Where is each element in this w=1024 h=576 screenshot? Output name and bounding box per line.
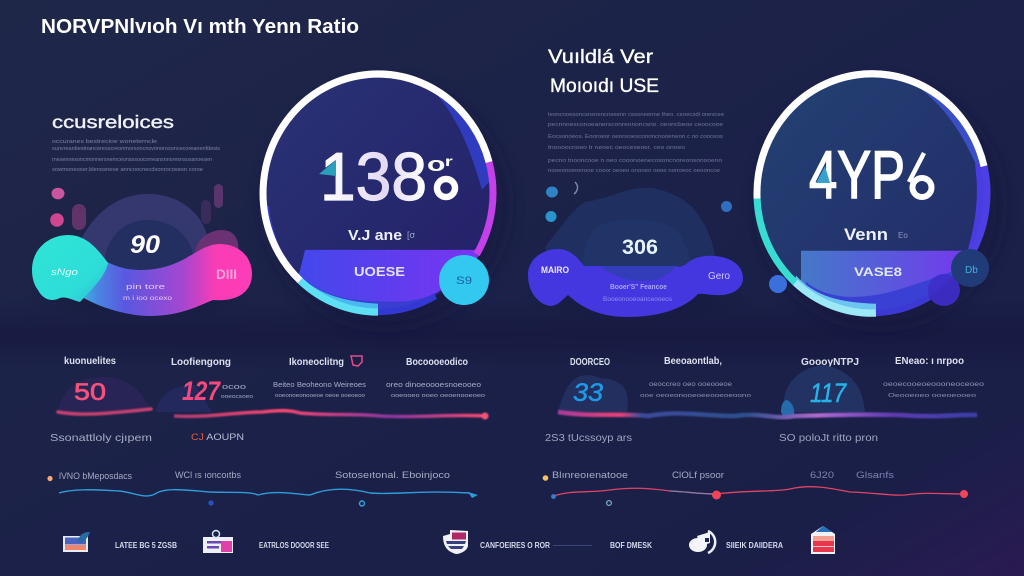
decorative dots: pink bbox=[50, 184, 223, 230]
small notes: ooe oeoeonooeoeeooeoeoono bbox=[640, 393, 751, 399]
body text: right bbox=[548, 112, 724, 174]
timeline labels: ClOLf psoor bbox=[672, 470, 724, 481]
timeline labels: lVNO bMeposdacs bbox=[59, 471, 132, 482]
chart: left blue line bbox=[59, 489, 478, 506]
label: blob lines: Booeonooeoanceooeos bbox=[603, 296, 673, 303]
heading: left: ccusreloices bbox=[52, 112, 174, 132]
value: 90: 90 bbox=[130, 231, 160, 259]
chart: left pink wave bbox=[58, 409, 488, 420]
body text: left: sunvreanbestnanceresscreonmorsoncnsvonorosoncecoreanenfdesis bbox=[52, 146, 221, 152]
column headers: kuonuelites bbox=[64, 356, 116, 367]
body text: left: occuranes bestrecioe woneterncle bbox=[52, 139, 157, 145]
caption: 2S3 tUcssoyp ars bbox=[545, 433, 632, 444]
column headers: GoooyNTPJ bbox=[801, 357, 859, 368]
body text: right: Eocsonoeos. Eooroeor oeoceoescononcnooeneon c no cooceos bbox=[548, 134, 723, 140]
label: band: VASE8 bbox=[854, 265, 902, 279]
legend text: SIIEIK DAIIDERA bbox=[726, 541, 783, 550]
panel: right captions bbox=[543, 432, 894, 481]
badge: cyan bbox=[439, 255, 489, 305]
label: value name: Venn bbox=[844, 225, 888, 244]
timeline labels: Blınreoıenatooe bbox=[552, 470, 628, 481]
timeline labels: Sotoseıtonal. Eboinjoco bbox=[335, 470, 450, 481]
label: pink: DIII bbox=[216, 267, 237, 282]
value: 138%: oʳ bbox=[427, 154, 453, 176]
badge: cyan: S9 bbox=[456, 275, 472, 287]
label: blob lines: Booer'S" Feancoe bbox=[610, 284, 667, 291]
column headers: Beeoaontlab, bbox=[664, 356, 722, 367]
caption: Ssonattloly cjıpem bbox=[50, 432, 152, 444]
panel: right metrics row bbox=[558, 356, 985, 416]
title: NORVPNlvıoh Vı mth Yenn Ratio bbox=[41, 15, 359, 38]
caption: SO poloJt ritto pron bbox=[779, 432, 878, 444]
panel: left circle gauge bbox=[262, 74, 508, 335]
timeline labels bbox=[59, 470, 450, 482]
dot: blue bbox=[769, 275, 787, 293]
panel: right circle gauge bbox=[757, 74, 1002, 336]
dome: 50 bbox=[58, 377, 150, 413]
dome: 127 bbox=[156, 385, 212, 412]
dome bbox=[545, 188, 716, 280]
value: 138%: 138 bbox=[320, 139, 427, 215]
decorative dots: blue bbox=[546, 182, 732, 222]
panel: footer legend bbox=[63, 526, 835, 554]
panel: left blob gauge bbox=[22, 184, 258, 320]
timeline labels: WCl ıs ıoncoıtbs bbox=[175, 470, 241, 481]
timeline labels: 6J20 bbox=[810, 470, 834, 481]
teal blob bbox=[32, 235, 108, 302]
main blue blob bbox=[528, 249, 743, 317]
small notes: ooeocsoeo bbox=[221, 394, 253, 400]
small notes: oreo dinoeoooesnoeooeo bbox=[386, 382, 481, 389]
label: blob lines bbox=[123, 284, 173, 302]
label: blob lines: m i ioo ocexo bbox=[123, 296, 173, 302]
icon: envelope bbox=[811, 526, 835, 554]
value: 127: 127 bbox=[182, 376, 222, 406]
column headers: Ikoneoclitng bbox=[289, 357, 344, 368]
panel: left metrics row bbox=[58, 356, 485, 413]
small notes: ooeonoeonooeoe oeoe ooeoeoo bbox=[275, 393, 365, 399]
label: blob lines: pin tore bbox=[126, 284, 165, 291]
chart: right red line bbox=[551, 487, 968, 505]
label: teal: sNgo bbox=[51, 267, 78, 277]
badge: dark: Db bbox=[965, 265, 978, 276]
panel: right blob gauge bbox=[518, 182, 762, 322]
dot: yellow bbox=[543, 475, 548, 481]
small notes: oeoecooeoeoooneoceoeo bbox=[883, 381, 985, 388]
panel: left circle gauge: [σ bbox=[407, 230, 416, 240]
column headers: DOORCEO bbox=[570, 357, 610, 368]
column headers: Bocoooeodico bbox=[406, 357, 468, 368]
icon: folder bbox=[203, 530, 233, 553]
dome: 117 bbox=[783, 365, 865, 412]
icon: heart tag bbox=[351, 356, 362, 366]
small notes bbox=[221, 382, 485, 400]
body text: right: tnoooocnoeo tr neoec oeoceseoer. ceo onoeo bbox=[548, 145, 685, 151]
legend text: EATRLOS DOOOR SEE bbox=[259, 541, 330, 550]
column headers bbox=[64, 356, 468, 368]
chart: right multicolor wave bbox=[558, 412, 977, 417]
body text: right: nooeonoeoerooe cooor oeoeo onooeo oeoe nonoeoc oeooncoe bbox=[548, 168, 720, 174]
value: 117: 117 bbox=[810, 378, 847, 408]
legend text: CANFOEIRES O ROR bbox=[480, 541, 550, 550]
value: 50: 50 bbox=[74, 379, 106, 406]
icon: shield bbox=[443, 530, 468, 554]
label: band: UOESE bbox=[354, 264, 405, 279]
label: left lobe: MAIRO bbox=[541, 265, 569, 275]
small notes: Beiteo Beoheono Weireoes bbox=[273, 382, 367, 389]
main gradient blob bbox=[72, 244, 252, 316]
column headers bbox=[570, 356, 964, 368]
body text: left bbox=[52, 139, 221, 173]
label: blob lines bbox=[603, 284, 673, 303]
timeline labels bbox=[552, 470, 894, 481]
panel: right heading and text bbox=[548, 47, 724, 174]
small notes: oeoccreo oeo ooeooeoe bbox=[649, 381, 732, 388]
panel: left section heading and text bbox=[52, 112, 221, 173]
small notes: ocoo bbox=[222, 384, 246, 391]
dome bbox=[78, 194, 208, 270]
body text: left: sowmoneoxer.blenosneoe anncoocnecdsonrocosesn coroe bbox=[52, 167, 203, 173]
timeline labels: Glsanfs bbox=[856, 470, 894, 481]
panel: left captions bbox=[47, 432, 450, 482]
gauge disc and ring bbox=[757, 74, 990, 336]
body text: right: pecnnoesconoeanersconreononcsno. oeoncbeos ceoocooe bbox=[548, 122, 723, 128]
body text: right: pecno tnooncooe n oeo cooonoeoecosoncnoreonsonooeno bbox=[548, 158, 722, 164]
value: 306: 306 bbox=[622, 236, 658, 259]
small notes: ooeooeo ooeo oeoenooeoeo bbox=[391, 393, 485, 399]
panel: right circle gauge: Eo bbox=[898, 231, 908, 240]
icon: round badge bbox=[689, 531, 715, 553]
badge: dark bbox=[928, 249, 989, 306]
value: 4YP%: 4YP bbox=[809, 137, 905, 213]
legend text: LATEE BG 5 ZGSB bbox=[115, 541, 177, 550]
value: 33: 33 bbox=[573, 379, 603, 407]
body text: left: rnesennesoncmonnersnernceonsssoocorreansnnoresnsosanoesen bbox=[52, 157, 212, 163]
label: value name: V.J ane bbox=[348, 227, 402, 244]
column headers: Loofiengong bbox=[171, 357, 231, 368]
body text: right: teoncnoesoncsnsnencnseenn cssoneenne theo. ceoecsdi onevcee bbox=[548, 112, 724, 118]
caption: accent: CJ AOUPN bbox=[191, 432, 244, 443]
column headers: ENeao: ı nrpoo bbox=[895, 356, 964, 367]
dot: orange bbox=[47, 476, 53, 481]
panel: right heading and text: Moıoıdı USE bbox=[550, 76, 659, 97]
icon: card bbox=[63, 532, 90, 552]
gauge disc and ring bbox=[262, 74, 500, 335]
legend text: BOF DMESK bbox=[610, 541, 652, 550]
small notes: Oeooeoeo ooeoeooeo bbox=[888, 393, 976, 399]
heading: right: Vuıldlá Ver bbox=[548, 47, 654, 68]
dome: 33 bbox=[558, 375, 628, 412]
label: right lobe: Gero bbox=[708, 271, 730, 282]
small notes bbox=[640, 381, 985, 399]
